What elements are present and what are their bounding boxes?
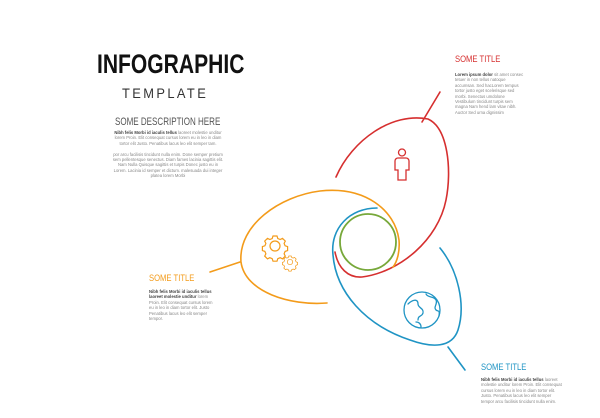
- icon: globe: [404, 292, 440, 328]
- panel: blue title block: [481, 362, 562, 404]
- icon: gears: [262, 236, 298, 271]
- panel: red title block: SOME TITLE: [455, 54, 500, 64]
- subtitle: TEMPLATE: [122, 85, 208, 101]
- blue petal: [333, 208, 465, 370]
- description text: Nibh felis Morbi id iaculis tellus laoreet molestie unditur lorem Proin. Elit consequat cursus lorem eu in leo in diam tortor elit Justo. Penatibus lacus leo elit semper tam.: [114, 130, 222, 146]
- red petal: [335, 92, 449, 277]
- title: INFOGRAPHIC: [97, 49, 244, 79]
- panel: orange title block: SOME TITLE: [149, 273, 194, 283]
- panel: red title block: [455, 54, 524, 115]
- panel: red title block: Lorem ipsum dolor sit amet consec tetuer in non tellus natoque accumsan. Sed hacLorem tempus tortor justo eget scelerisque sed morbi. Senectus umdolone Vestibulum tincidunt turpis sem magna Nam hend lam vitae nibh. Auctor Sed urna dignissim: [455, 72, 523, 115]
- orange petal: [210, 190, 399, 303]
- icon: person: [395, 149, 409, 180]
- panel: orange title block: Nibh felis Morbi id iaculis tellus laoreet molestie unditur lorem Proin. Elit consequat cursus lorem eu in leo in diam tortor elit. Justo Penatibus lacus leo elit semper tempor.: [149, 289, 213, 321]
- green center circle: [340, 214, 396, 270]
- panel: blue title block: SOME TITLE: [481, 362, 526, 372]
- panel: orange title block: [149, 273, 213, 321]
- panel: blue title block: Nibh felis Morbi id iaculis tellus laoreet molestie unditur lorem Proin. Elit consequat cursus lorem eu in leo in diam tortor elit. Justo. Penatibus lacus leo elit semper tempor arcu facilisis tincidunt nulla enim.: [481, 377, 562, 404]
- description heading: SOME DESCRIPTION HERE: [115, 116, 220, 128]
- description text: por arcu facilisis tincidunt nulla enim. Done semper pretium sem pellentesque senectus. Diam fames lacinia sagittis elit. Nam Nulla Quisque sagittis et turpis Donec justo eu in Lorem. Lacinia id semper et dictum. malesuada dui integer platea lorem Morbi: [113, 152, 223, 178]
- description text: [113, 130, 223, 178]
